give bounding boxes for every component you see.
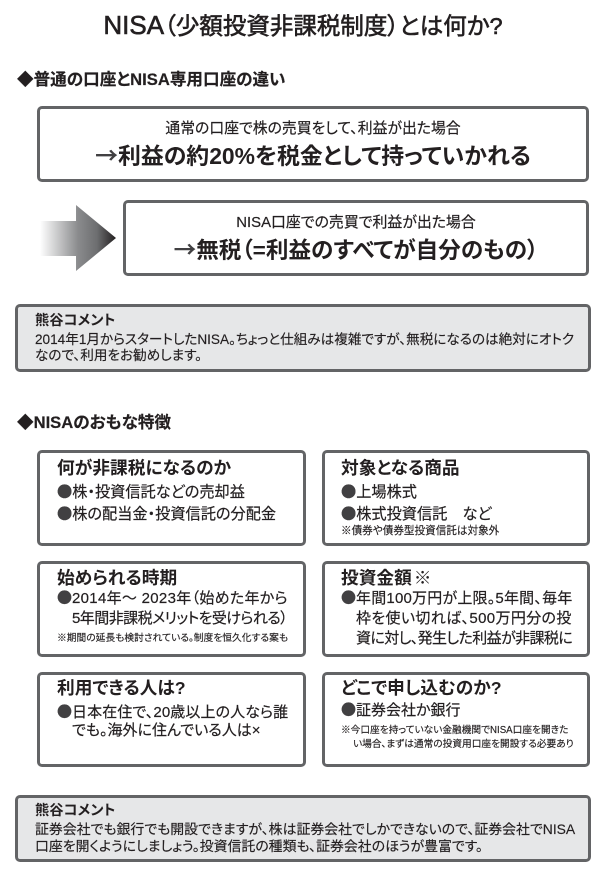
- card note: ※債券や債券型投資信託は対象外: [341, 524, 499, 536]
- text: NISA account condition: NISA口座での売買で利益が出た場合: [236, 214, 476, 230]
- comment body: [35, 332, 574, 362]
- card list: ●年間100万円が上限。5年間、毎年: [341, 586, 572, 608]
- arrow: gradient right arrow: [42, 205, 116, 271]
- comment body: なので、利用をお勧めします。: [35, 348, 202, 362]
- card list: [57, 586, 288, 626]
- heading: difference between accounts: ◆普通の口座とNISA専用口座の違い: [17, 70, 286, 89]
- text: normal account result: →利益の約20%を税金として持っていかれる: [95, 137, 531, 171]
- card note: ※期間の延長も検討されている。制度を恒久化する案も: [57, 632, 288, 644]
- panel: Kumagai comment 2: [15, 795, 591, 862]
- text: normal account condition: 通常の口座で株の売買をして、利益が出た場合: [165, 121, 461, 137]
- comment heading: 熊谷コメント: [35, 313, 115, 329]
- card list: [341, 480, 492, 524]
- card list: [341, 586, 572, 646]
- card note: ※今口座を持っていない金融機関でNISA口座を開きた: [341, 725, 568, 736]
- heading: main features: ◆NISAのおもな特徴: [17, 413, 171, 432]
- comment heading: 熊谷コメント: [35, 802, 115, 818]
- card list: ●上場株式: [341, 480, 417, 502]
- card list: ●株の配当金・投資信託の分配金: [57, 502, 276, 524]
- card list: ●2014年～ 2023年（始めた年から: [57, 586, 288, 608]
- card note: [341, 724, 574, 750]
- card list: ●証券会社か銀行: [341, 698, 461, 720]
- card list: ●株式投資信託 など: [341, 502, 492, 524]
- panel: NISA account: [123, 200, 589, 276]
- panel: what is tax free: [37, 450, 306, 546]
- card list: 資に対し、発生した利益が非課税に: [356, 630, 572, 646]
- comment body: 証券会社でも銀行でも開設できますが、株は証券会社でしかできないので、証券会社でNISA: [35, 820, 575, 836]
- card heading: 始められる時期: [57, 568, 177, 588]
- comment body: 2014年1月からスタートしたNISA。ちょっと仕組みは複雑ですが、無税になるのは絶対にオトク: [35, 332, 574, 346]
- card list: [57, 700, 288, 738]
- card list: ●株・投資信託などの売却益: [57, 480, 245, 502]
- card list: 枠を使い切れば、500万円分の投: [356, 610, 572, 626]
- title: NISA（少額投資非課税制度）とは何か?: [103, 10, 503, 40]
- text: NISA account result: →無税（=利益のすべてが自分のもの）: [174, 232, 538, 265]
- card heading: 利用できる人は?: [57, 678, 186, 698]
- card list: [57, 480, 276, 524]
- panel: start period: [37, 561, 306, 657]
- panel: where to apply: [322, 672, 590, 767]
- panel: eligible products: [322, 450, 590, 546]
- panel: normal account: [37, 106, 589, 182]
- panel: Kumagai comment 1: [15, 304, 591, 372]
- card heading: 何が非課税になるのか: [57, 458, 231, 478]
- card list: でも。海外に住んでいる人は×: [72, 722, 260, 738]
- card list: ●日本在住で、20歳以上の人なら誰: [57, 700, 288, 722]
- panel: investment amount: [322, 561, 590, 657]
- card heading: どこで申し込むのか?: [341, 678, 502, 698]
- comment body: [35, 820, 576, 854]
- card list: 5年間非課税メリットを受けられる）: [72, 610, 287, 626]
- card note: い場合、まずは通常の投資用口座を開設する必要あり: [353, 738, 574, 750]
- panel: who can use: [37, 672, 306, 767]
- card heading: 投資金額※: [341, 568, 431, 588]
- card heading: 対象となる商品: [341, 458, 460, 478]
- comment body: 口座を開くようにしましょう。投資信託の種類も、証券会社のほうが豊富です。: [35, 838, 483, 854]
